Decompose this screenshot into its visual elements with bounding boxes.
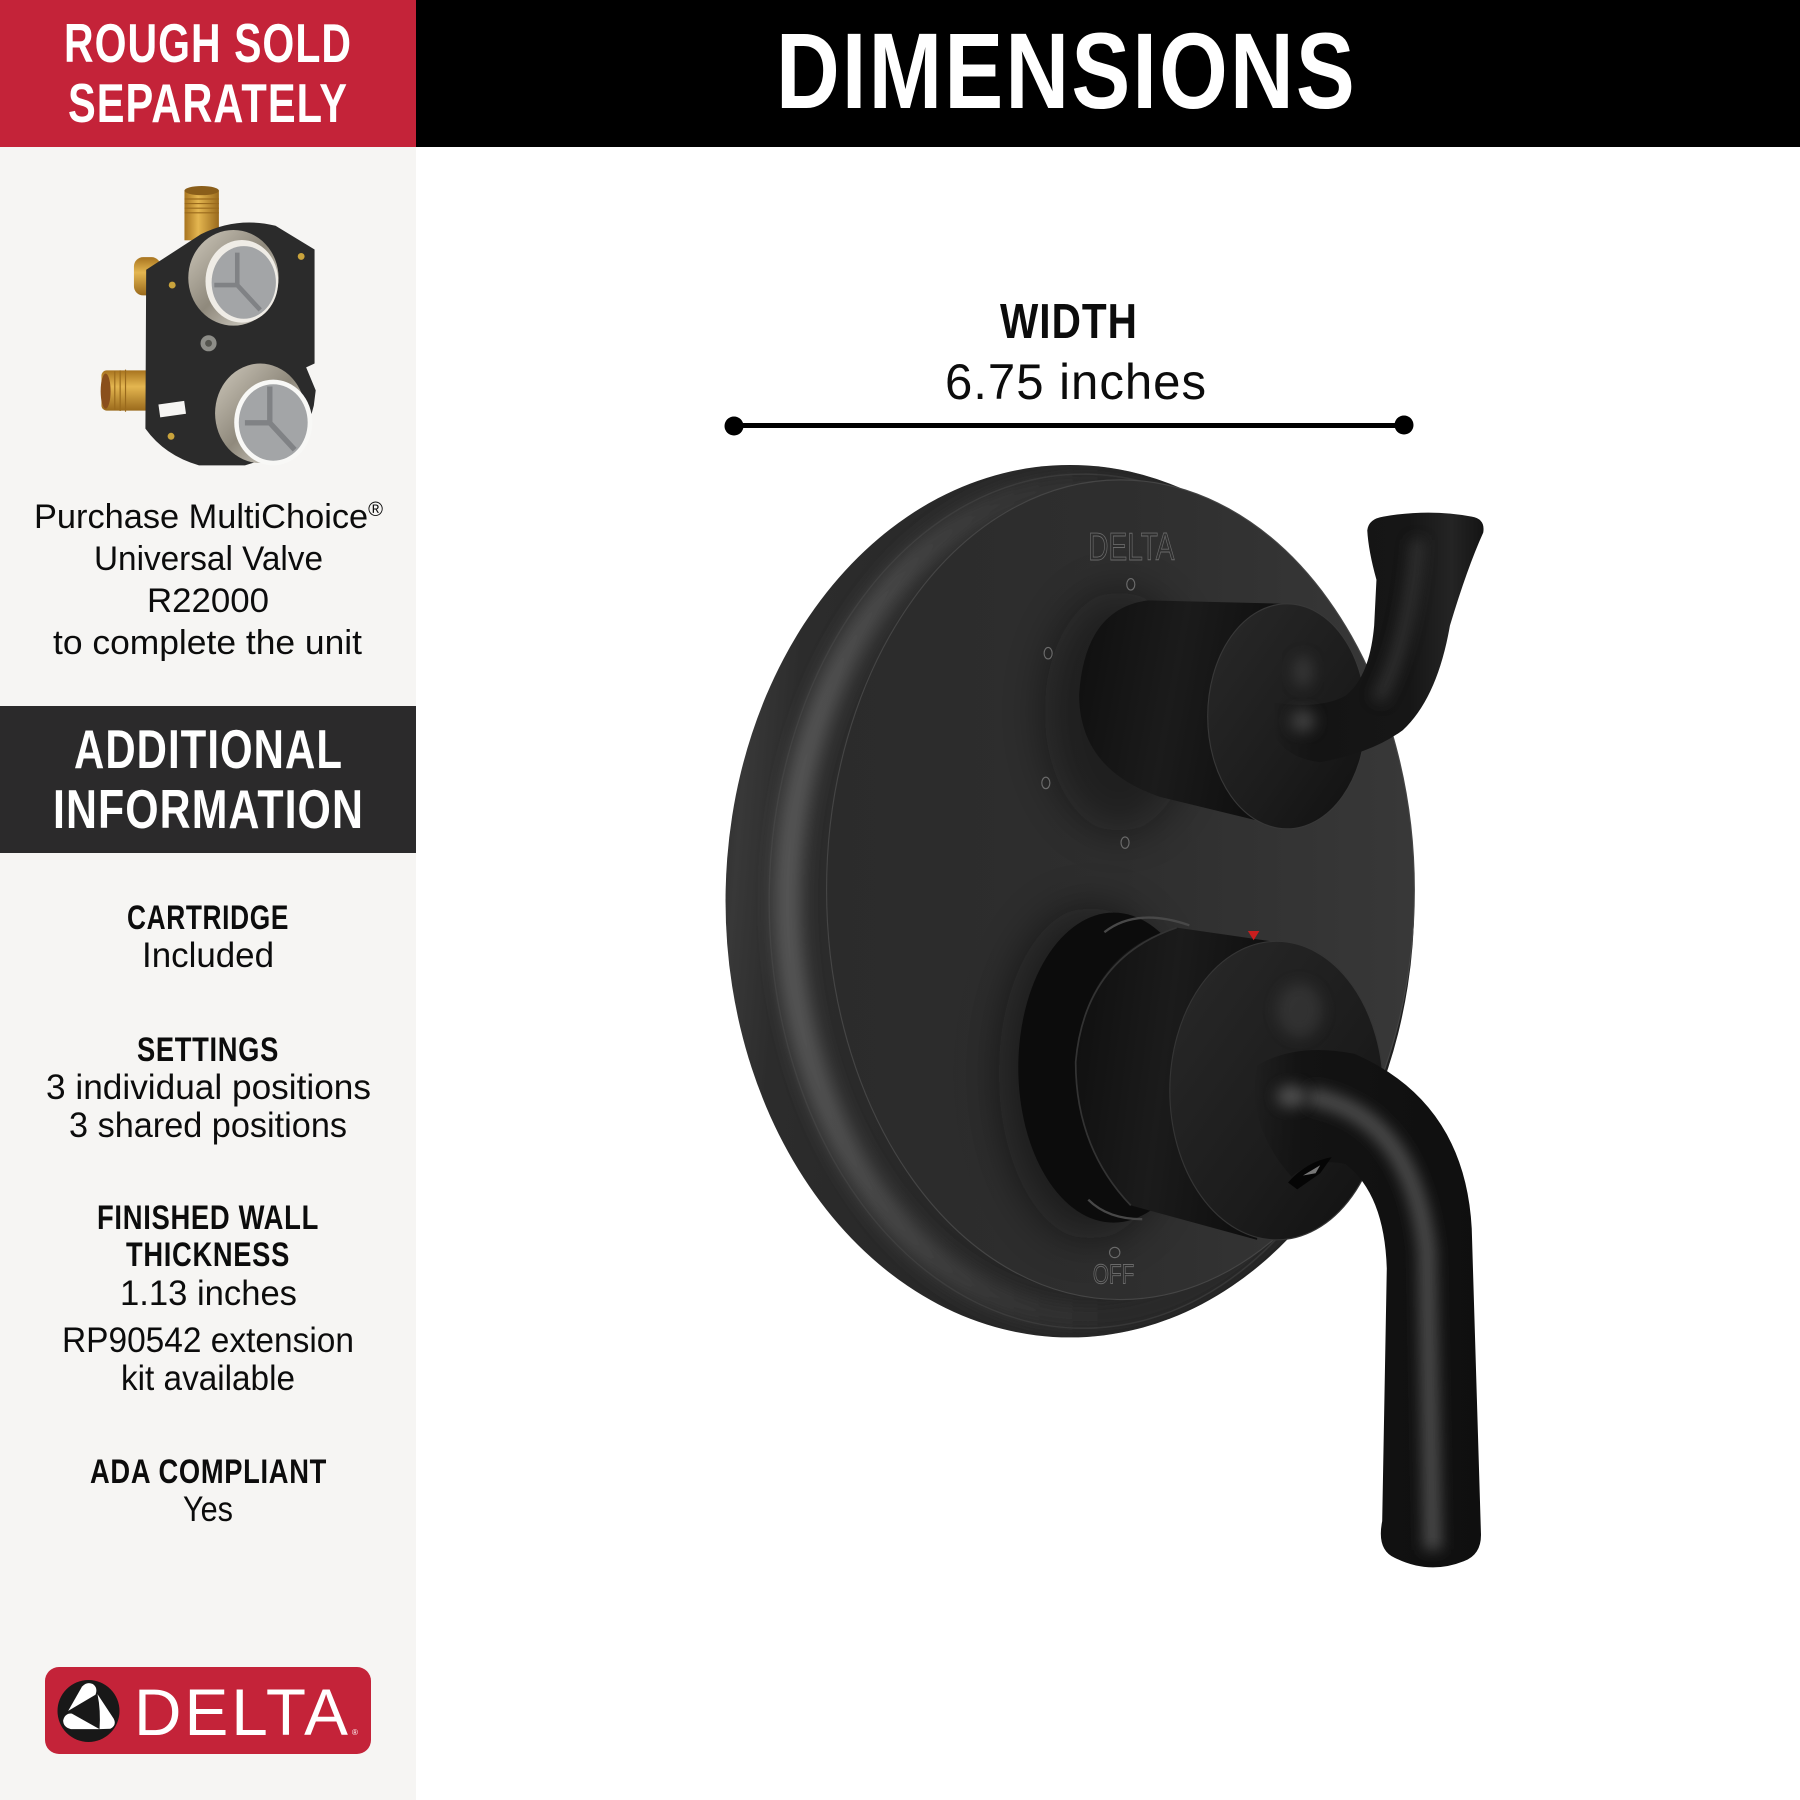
text: purchase MultiChoice valve: Universal Valve: [94, 540, 323, 578]
lower valve knob: [1076, 928, 1383, 1240]
logo: Delta: ®: [352, 1728, 358, 1737]
icon: rough-in valve: [101, 186, 316, 465]
dimension: width label: WIDTH: [1000, 295, 1138, 349]
header: additional information: INFORMATION: [53, 778, 364, 840]
title: dimensions: [416, 0, 1800, 147]
spec: cartridge: [127, 899, 289, 975]
dimension: width label: 6.75 inches: [945, 354, 1207, 410]
lower handle base ring: [1018, 913, 1209, 1223]
text: purchase MultiChoice valve: [34, 498, 383, 662]
spec: finished wall thickness: kit available: [121, 1359, 295, 1398]
spec: ADA compliant: ADA COMPLIANT: [90, 1453, 327, 1491]
spec: cartridge: Included: [142, 936, 274, 975]
text: purchase MultiChoice valve: Purchase MultiChoice: [34, 498, 365, 536]
trim plate: OFF: [1093, 1258, 1134, 1289]
text: purchase MultiChoice valve: to complete the unit: [53, 624, 363, 662]
header: additional information: [0, 706, 416, 853]
text: purchase MultiChoice valve: ®: [368, 499, 383, 521]
title: dimensions: DIMENSIONS: [776, 10, 1357, 131]
spec: finished wall thickness: 1.13 inches: [120, 1274, 297, 1313]
header: additional information: ADDITIONAL: [74, 718, 343, 780]
upper diverter knob: [1079, 600, 1366, 829]
panel: sidebar background: [0, 0, 416, 1800]
header: rough sold separately: SEPARATELY: [68, 72, 348, 134]
text: purchase MultiChoice valve: R22000: [147, 582, 269, 620]
spec: settings: 3 individual positions: [46, 1068, 371, 1107]
spec: finished wall thickness: RP90542 extension: [62, 1321, 354, 1360]
lower lever handle: [1255, 1050, 1481, 1567]
trim plate: DELTA: [1088, 526, 1174, 569]
spec: ADA compliant: Yes: [183, 1490, 233, 1529]
header: rough sold separately: ROUGH SOLD: [64, 12, 352, 74]
spec: settings: 3 shared positions: [69, 1106, 347, 1145]
spec: settings: [46, 1031, 371, 1145]
spec: finished wall thickness: THICKNESS: [126, 1236, 290, 1274]
logo: Delta: DELTA: [134, 1675, 351, 1749]
spec: settings: SETTINGS: [137, 1031, 279, 1069]
header: rough sold separately: [0, 0, 416, 147]
logo: Delta: [45, 1667, 371, 1754]
dimension: width label: [945, 295, 1207, 410]
product: shower valve trim: [726, 465, 1484, 1567]
upper lever handle: [1274, 513, 1484, 762]
spec: finished wall thickness: FINISHED WALL: [97, 1199, 319, 1237]
spec: finished wall thickness: [62, 1199, 354, 1398]
trim plate: [726, 465, 1414, 1337]
spec: cartridge: CARTRIDGE: [127, 899, 289, 937]
spec: ADA compliant: [90, 1453, 327, 1529]
dimension line: width arrow: [724, 416, 1414, 436]
